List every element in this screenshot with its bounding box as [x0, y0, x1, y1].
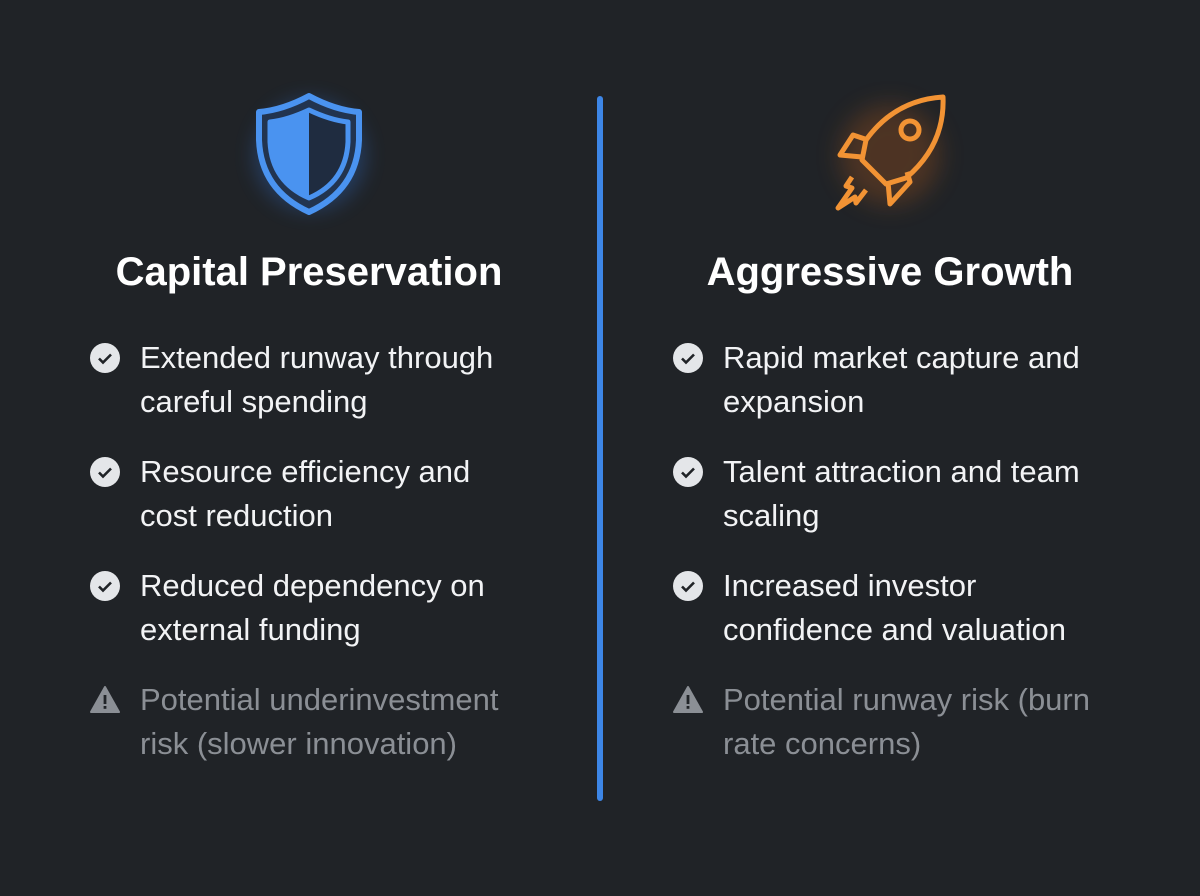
item: Extended runway through careful spending: [140, 340, 493, 419]
icon: shield: [246, 90, 374, 220]
item: Increased investor confidence and valuation: [723, 568, 1066, 647]
list: left: [90, 340, 498, 761]
warning item: Potential underinvestment risk (slower innovation): [140, 682, 498, 761]
heading: Capital Preservation: Capital Preservation: [116, 250, 502, 294]
heading: Aggressive Growth: Aggressive Growth: [707, 250, 1073, 294]
warning item: Potential runway risk (burn rate concerns): [723, 682, 1090, 761]
icon: rocket: [831, 94, 949, 214]
divider: [597, 96, 603, 801]
item: Talent attraction and team scaling: [723, 454, 1080, 533]
item: Resource efficiency and cost reduction: [140, 454, 470, 533]
list: right: [673, 340, 1090, 761]
item: Rapid market capture and expansion: [723, 340, 1080, 419]
item: Reduced dependency on external funding: [140, 568, 485, 647]
